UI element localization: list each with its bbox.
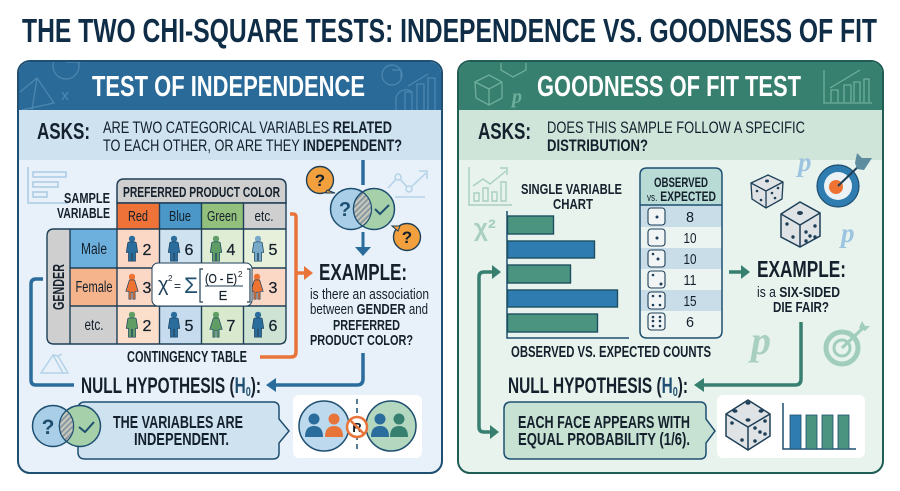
arrow: table to example: [729, 265, 750, 279]
example text: goodness of fit: is a SIX-SIDED: [757, 284, 840, 301]
formula box: E: [219, 288, 228, 303]
contingency table: 5: [185, 318, 194, 335]
header band: independence: [19, 62, 441, 110]
contingency table: Male: [81, 241, 107, 258]
icon: decorative bar chart: [469, 167, 512, 205]
arrow: null hypothesis to table: [31, 279, 74, 385]
arrow: example to null hypothesis: [694, 322, 801, 392]
example text: independence: is there an association: [310, 286, 429, 303]
arrow: table to example: [260, 214, 313, 357]
contingency table: 6: [269, 318, 278, 335]
decorative chi symbol: χ²: [474, 215, 496, 242]
callout: variables are independent: [32, 402, 289, 459]
asks band: independence: ASKS:: [37, 118, 90, 144]
observed vs expected table: [640, 168, 722, 338]
null hypothesis heading: goodness of fit: 0: [673, 384, 678, 399]
single variable chart: SINGLE VARIABLE: [521, 181, 622, 198]
contingency table: etc.: [254, 209, 274, 225]
decorative p symbols: p: [796, 147, 812, 177]
icon: large die: [781, 202, 820, 247]
example text: independence: [310, 259, 429, 349]
contingency table: etc.: [84, 317, 104, 334]
observed vs expected table: 10: [684, 251, 696, 268]
formula box: [152, 263, 252, 306]
null hypothesis heading: independence: 0: [246, 384, 251, 399]
asks band: goodness of fit: [459, 110, 882, 160]
callout: variables are independent: THE VARIABLES ARE: [113, 412, 243, 432]
contingency table: 2: [143, 242, 152, 259]
observed vs expected table: 8: [686, 209, 694, 226]
formula box: Σ: [184, 273, 198, 298]
icon: decorative triangles: [41, 354, 68, 373]
single variable chart: [507, 181, 629, 338]
contingency table: Green: [207, 209, 237, 225]
example text: independence: EXAMPLE:: [319, 259, 407, 285]
header text: test of independence: TEST OF INDEPENDENCE: [92, 71, 365, 103]
asks band: independence: TO EACH OTHER, OR ARE THEY INDEPENDENT?: [103, 136, 402, 155]
contingency table: 5: [269, 242, 278, 259]
observed vs expected table: 11: [684, 272, 696, 289]
icon: venn with question marks: ?: [339, 199, 351, 221]
formula box: 2: [168, 274, 173, 283]
asks band: independence: [19, 110, 441, 160]
icon: faded target: [826, 321, 870, 364]
formula box: 2: [238, 270, 243, 279]
icon: small die: [751, 175, 783, 208]
icon: fair die and uniform bars: [717, 395, 865, 458]
decorative p symbols: p: [839, 218, 854, 248]
sample variable label: SAMPLE: [64, 191, 110, 207]
single variable chart: CHART: [553, 196, 593, 213]
sample variable label: [57, 191, 110, 222]
callout: variables are independent: ?: [42, 416, 54, 439]
icon: separated groups: R: [352, 420, 362, 435]
callout: equal probability: EQUAL PROBABILITY (1/6).: [518, 429, 690, 449]
asks band: goodness of fit: DISTRIBUTION?: [547, 136, 648, 155]
example text: goodness of fit: DIE FAIR?: [773, 299, 829, 316]
observed vs expected table: OBSERVED: [654, 174, 708, 190]
decorative p symbols: p: [748, 318, 771, 363]
panel: goodness of fit: [458, 61, 883, 473]
example text: goodness of fit: EXAMPLE:: [757, 256, 846, 282]
decorative p symbols: [748, 147, 854, 363]
icon: decorative line chart: [388, 171, 427, 197]
formula box: =: [174, 279, 181, 293]
null hypothesis heading: goodness of fit: NULL HYPOTHESIS (H: [508, 373, 728, 398]
header band: goodness of fit: p: [510, 86, 522, 108]
contingency table: [47, 179, 286, 344]
header band: goodness of fit: [458, 61, 883, 110]
icon: venn with question marks: [306, 160, 420, 256]
observed vs expected table: 6: [686, 314, 694, 331]
icon: venn with question marks: ?: [402, 228, 412, 247]
asks band: independence: ARE TWO CATEGORICAL VARIABLES RELATED: [103, 118, 392, 137]
contingency table: Female: [76, 279, 112, 296]
observed vs expected table: vs. EXPECTED: [647, 188, 716, 204]
formula box: χ: [158, 274, 169, 296]
null hypothesis heading: independence: ):: [251, 373, 261, 398]
arrow: example to null hypothesis: [266, 353, 363, 392]
icon: venn with question marks: ?: [315, 171, 325, 190]
icon: decorative list: [28, 167, 68, 203]
contingency table: PREFERRED PRODUCT COLOR: [123, 185, 280, 201]
contingency table: GENDER: [51, 264, 68, 310]
icon: target with dart: [817, 153, 872, 207]
example text: independence: PRODUCT COLOR?: [310, 332, 413, 349]
example text: goodness of fit: [757, 256, 846, 316]
observed vs expected table: 10: [684, 230, 696, 247]
contingency table caption: CONTINGENCY TABLE: [127, 349, 247, 366]
formula box: (O - E): [205, 271, 237, 286]
header text: goodness of fit: GOODNESS OF FIT TEST: [537, 71, 801, 103]
panel: test of independence: [18, 53, 442, 473]
observed vs expected table: 15: [684, 293, 696, 310]
callout: equal probability: [504, 402, 715, 459]
chart caption: OBSERVED VS. EXPECTED COUNTS: [511, 344, 711, 361]
sample variable label: VARIABLE: [57, 206, 110, 222]
callout: equal probability: EACH FACE APPEARS WITH: [518, 412, 690, 432]
contingency table: Blue: [169, 209, 191, 225]
asks band: goodness of fit: DOES THIS SAMPLE FOLLOW A SPECIFIC: [547, 118, 805, 137]
null hypothesis heading: goodness of fit: ):: [678, 373, 688, 398]
contingency table: Red: [128, 209, 148, 225]
contingency table: 7: [227, 318, 236, 335]
example text: independence: between GENDER and: [310, 301, 428, 318]
asks band: goodness of fit: ASKS:: [478, 118, 531, 144]
callout: variables are independent: INDEPENDENT.: [134, 429, 229, 449]
contingency table: 6: [185, 242, 194, 259]
contingency table: 2: [143, 318, 152, 335]
contingency table: 3: [269, 280, 278, 297]
icon: separated groups: [293, 395, 422, 458]
example text: independence: PREFERRED: [333, 317, 400, 334]
contingency table: 4: [227, 242, 236, 259]
contingency table: 3: [143, 280, 152, 297]
arrow: double-headed link: [479, 265, 501, 439]
null hypothesis heading: independence: NULL HYPOTHESIS (H: [81, 373, 301, 398]
